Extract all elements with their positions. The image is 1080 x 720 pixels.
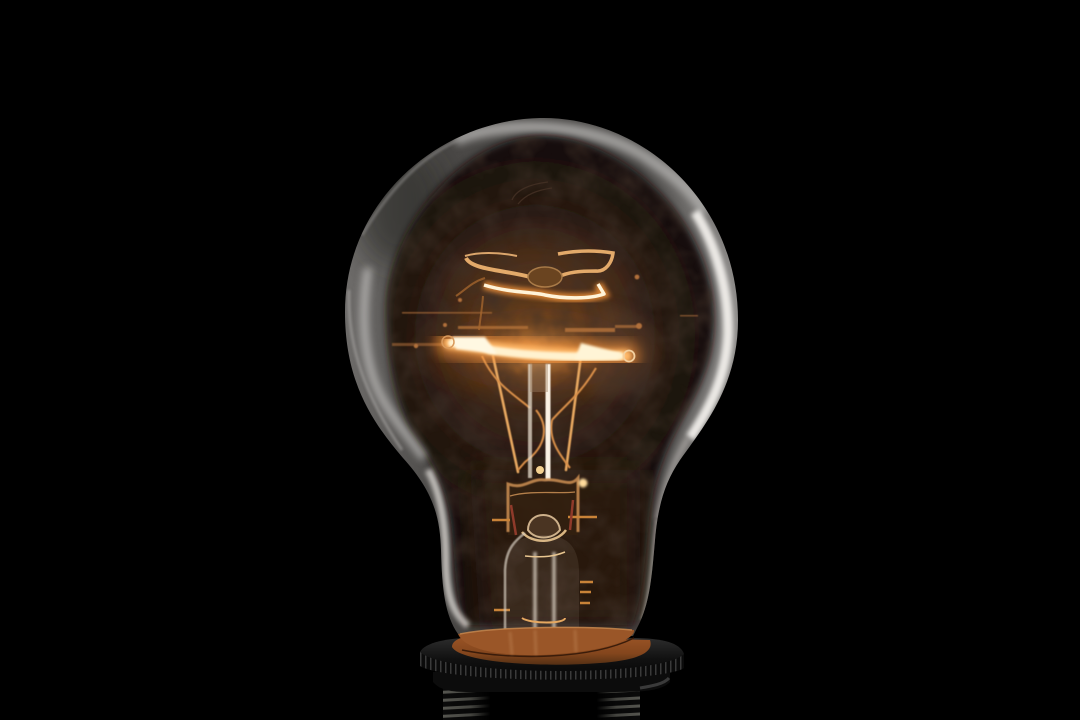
neck brown tint bbox=[470, 470, 640, 630]
right haze bbox=[590, 305, 660, 397]
socket threads bbox=[443, 688, 640, 720]
filament end rings bbox=[442, 336, 454, 348]
warm inner glow bbox=[425, 304, 644, 402]
top rim band bbox=[455, 127, 705, 212]
bulb glass body bbox=[345, 118, 738, 636]
glowing upper filament bbox=[484, 284, 604, 298]
left rim highlight bbox=[364, 268, 424, 458]
socket collar bbox=[420, 638, 684, 680]
side wires bbox=[492, 517, 597, 610]
stem flare tube bbox=[505, 535, 579, 632]
hub bbox=[528, 267, 562, 287]
glowing main filament bbox=[442, 336, 634, 362]
bulb interior bbox=[387, 136, 714, 625]
stem reflection in disc bbox=[510, 630, 576, 655]
socket lower band bbox=[433, 672, 670, 692]
stem bead bbox=[528, 515, 560, 538]
upper left dim glass bbox=[355, 145, 445, 265]
glass mount bbox=[492, 478, 597, 632]
mount block bbox=[508, 482, 578, 535]
glass top ring reflection bbox=[512, 182, 552, 204]
filament support wires and glass stem bbox=[482, 348, 596, 480]
filament core bbox=[452, 343, 620, 357]
centre glass rods bbox=[530, 364, 548, 480]
mottled dust texture bbox=[380, 130, 720, 630]
illustration: glowing light bulb bbox=[345, 118, 738, 720]
filament glow bbox=[450, 343, 625, 356]
support wires bbox=[493, 348, 582, 472]
right rim highlight bbox=[690, 212, 728, 438]
copper base disc bbox=[452, 627, 651, 665]
upper dust branch bbox=[456, 278, 485, 330]
dust streaks bbox=[392, 275, 698, 348]
left neck highlight bbox=[428, 470, 468, 626]
upper wire loop bbox=[465, 253, 517, 256]
lamp socket bbox=[420, 638, 684, 720]
upper filament support bbox=[465, 251, 613, 298]
glass bulb bbox=[345, 118, 738, 636]
